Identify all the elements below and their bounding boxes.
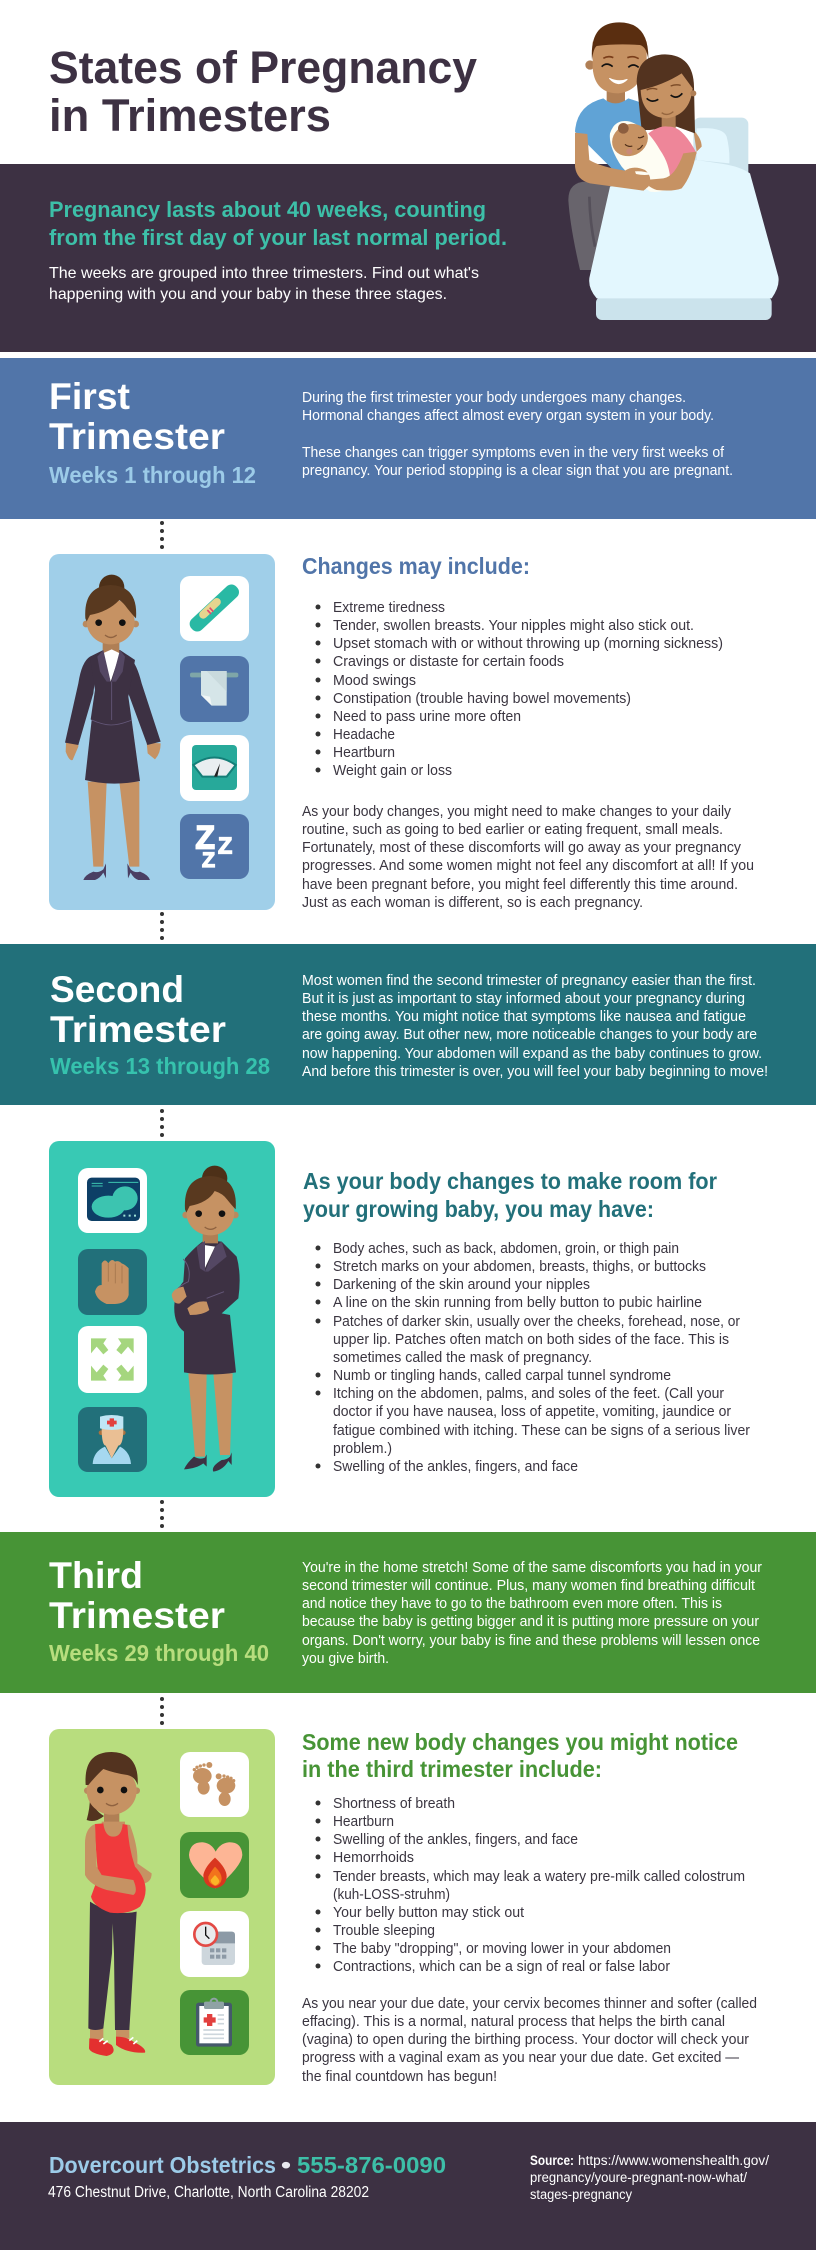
panel: footer	[0, 2122, 816, 2250]
bullet list: third trimester: Your belly button may stick out	[333, 1905, 524, 1921]
bullet list: third trimester: Tender breasts, which may leak a watery pre-milk called colostrum	[333, 1869, 745, 1885]
bullet list: third trimester: Hemorrhoids	[333, 1850, 414, 1866]
panel: intro band	[0, 164, 816, 352]
icon: footprints	[180, 1752, 249, 1817]
panel: second trimester band	[0, 944, 816, 1105]
panel: second trimester band: are going away. But other new, more noticeable changes to your body are	[302, 1027, 757, 1043]
panel: third trimester band: second trimester will continue. Plus, many women find breathing difficult	[302, 1578, 755, 1594]
icon: sleep Z letters: Z	[202, 848, 215, 872]
panel: second trimester band: Trimester	[50, 1009, 226, 1050]
text block: first trimester note: As your body changes, you might need to make changes to your daily	[302, 804, 732, 820]
title	[49, 42, 477, 141]
text block: third trimester note: As you near your due date, your cervix becomes thinner and softer (called	[302, 1996, 757, 2012]
bullet list: third trimester: Trouble sleeping	[333, 1923, 435, 1939]
heading: third trimester changes	[302, 1729, 738, 1782]
panel: footer: stages-pregnancy	[530, 2187, 632, 2202]
panel: second trimester band: these months. You might notice that symptoms like nausea and fatigue	[302, 1009, 746, 1025]
panel: first trimester illustration	[49, 554, 275, 910]
illustration: couple with newborn in bed	[568, 22, 779, 320]
panel: intro band: from the first day of your last normal period.	[49, 225, 507, 250]
bullet list: second trimester: Swelling of the ankles, fingers, and face	[333, 1459, 578, 1475]
text block: first trimester note	[302, 804, 754, 911]
panel: third trimester band: you give birth.	[302, 1651, 389, 1667]
bullet list: third trimester: Heartburn	[333, 1814, 394, 1830]
bullet list: first trimester: Mood swings	[333, 673, 416, 689]
panel: footer: 476 Chestnut Drive, Charlotte, North Carolina 28202	[48, 2184, 369, 2201]
text block: third trimester note: effacing). This is a normal, natural process that helps the birth canal	[302, 2014, 725, 2030]
text block: third trimester note	[302, 1996, 757, 2085]
heading: changes may include: Changes may include:	[302, 553, 530, 579]
panel: third trimester band: organs. Don't worry, your baby is fine and these problems will lessen once	[302, 1633, 760, 1649]
bullet list: first trimester: Weight gain or loss	[333, 763, 452, 779]
bullet list: third trimester: The baby "dropping", or moving lower in your abdomen	[333, 1941, 671, 1957]
icon: pregnancy test	[180, 576, 249, 641]
heading: second trimester changes: As your body changes to make room for	[303, 1168, 717, 1194]
bullet list: first trimester	[316, 600, 723, 779]
panel: first trimester band: During the first trimester your body undergoes many changes.	[302, 390, 686, 406]
panel: intro band: The weeks are grouped into three trimesters. Find out what's	[49, 265, 479, 282]
bullet list: second trimester: Stretch marks on your abdomen, breasts, thighs, or buttocks	[333, 1259, 706, 1275]
panel: third trimester band: Weeks 29 through 40	[49, 1640, 269, 1666]
title: in Trimesters	[49, 90, 331, 141]
panel: first trimester band: Weeks 1 through 12	[49, 462, 256, 488]
icon: hand	[78, 1249, 147, 1315]
panel: footer: •	[281, 2152, 291, 2178]
panel: first trimester band	[0, 358, 816, 519]
panel: third trimester band	[0, 1532, 816, 1693]
bullet list: second trimester: Itching on the abdomen, palms, and soles of the feet. (Call your	[333, 1386, 724, 1402]
panel: footer: Source:	[530, 2153, 574, 2168]
panel: second trimester band: But it is just as important to stay informed about your pregnancy during	[302, 991, 745, 1007]
panel: second trimester band: Second	[50, 969, 184, 1010]
bullet list: third trimester: Shortness of breath	[333, 1796, 455, 1812]
panel: first trimester band: These changes can trigger symptoms even in the very first weeks of	[302, 445, 725, 461]
bullet list: first trimester: Headache	[333, 727, 395, 743]
figure: woman in suit	[65, 575, 161, 880]
text block: third trimester note: progress with a vaginal exam as you near your due date. Get excited —	[302, 2050, 740, 2066]
panel: footer: pregnancy/youre-pregnant-now-what/	[530, 2170, 747, 2185]
icon: clock and calendar	[180, 1911, 249, 1977]
bullet list: first trimester: Upset stomach with or without throwing up (morning sickness)	[333, 636, 723, 652]
bullet list: first trimester: Tender, swollen breasts. Your nipples might also stick out.	[333, 618, 694, 634]
panel: first trimester band: pregnancy. Your period stopping is a clear sign that you are pregnant.	[302, 463, 733, 479]
heading: second trimester changes	[303, 1168, 717, 1222]
panel: footer: Dovercourt Obstetrics	[49, 2152, 276, 2178]
heading: second trimester changes: your growing baby, you may have:	[303, 1196, 654, 1222]
bullet list: second trimester: problem.)	[333, 1441, 392, 1457]
panel: intro band: Pregnancy lasts about 40 weeks, counting	[49, 197, 486, 222]
icon: sleep Z letters: Z	[218, 833, 232, 859]
panel: first trimester band: Trimester	[49, 416, 225, 457]
icon: heart with flame	[180, 1832, 249, 1898]
bullet list: first trimester: Constipation (trouble having bowel movements)	[333, 691, 631, 707]
text block: third trimester note: the final countdown has begun!	[302, 2069, 497, 2085]
heading: third trimester changes: Some new body changes you might notice	[302, 1729, 738, 1755]
text block: first trimester note: Just as each woman is different, so is each pregnancy.	[302, 895, 643, 911]
panel: first trimester band: Hormonal changes affect almost every organ system in your body.	[302, 408, 714, 424]
bullet list: second trimester: A line on the skin running from belly button to pubic hairline	[333, 1295, 702, 1311]
icon: ultrasound screen	[78, 1168, 147, 1233]
icon: weighing scale	[180, 735, 249, 801]
bullet list: first trimester: Heartburn	[333, 745, 395, 761]
figure: pregnant woman in red top	[84, 1752, 152, 2056]
bullet list: third trimester: Swelling of the ankles, fingers, and face	[333, 1832, 578, 1848]
bullet list: first trimester: Need to pass urine more often	[333, 709, 521, 725]
panel: third trimester band: You're in the home stretch! Some of the same discomforts you had in your	[302, 1560, 762, 1576]
bullet list: second trimester: sometimes called the mask of pregnancy.	[333, 1350, 592, 1366]
text block: first trimester note: have been pregnant before, you might feel differently this time around.	[302, 877, 738, 893]
panel: third trimester band: Third	[49, 1555, 143, 1596]
bullet list: second trimester: Body aches, such as back, abdomen, groin, or thigh pain	[333, 1241, 679, 1257]
panel: second trimester band: now happening. Your abdomen will expand as the baby continues to grow.	[302, 1046, 762, 1062]
panel: footer: https://www.womenshealth.gov/	[578, 2153, 769, 2168]
bullet list: first trimester: Cravings or distaste for certain foods	[333, 654, 564, 670]
bullet list: first trimester: Extreme tiredness	[333, 600, 445, 616]
panel: footer: 555-876-0090	[297, 2152, 446, 2178]
icon: stretching arrows	[78, 1326, 147, 1393]
panel: second trimester band: Most women find the second trimester of pregnancy easier than the first.	[302, 973, 756, 989]
bullet list: second trimester: Darkening of the skin around your nipples	[333, 1277, 590, 1293]
icon: doctor	[78, 1407, 147, 1472]
figure: pregnant woman in suit	[172, 1166, 240, 1472]
icon: toilet paper	[180, 656, 249, 722]
icon: sleep Z letters: Z	[195, 819, 215, 855]
panel: second trimester band: And before this trimester is over, you will feel your baby beginning to move!	[302, 1064, 768, 1080]
bullet list: second trimester	[316, 1241, 750, 1475]
connector dots	[160, 521, 164, 1725]
title: States of Pregnancy	[49, 42, 477, 93]
text block: first trimester note: Fortunately, most of these discomforts will go away as your pregnancy	[302, 840, 742, 856]
panel: third trimester band: and notice they have to go to the bathroom even more often. This is	[302, 1596, 722, 1612]
text block: third trimester note: (vagina) to open during the birthing process. Your doctor will check your	[302, 2032, 749, 2048]
bullet list: second trimester: upper lip. Patches often match on both sides of the face. This is	[333, 1332, 729, 1348]
heading: third trimester changes: in the third trimester include:	[302, 1756, 602, 1782]
panel: first trimester band: First	[49, 376, 130, 417]
icon: medical clipboard	[180, 1990, 249, 2055]
text block: first trimester note: progresses. And some women might not feel any discomfort at all! If you	[302, 858, 754, 874]
panel: intro band: happening with you and your baby in these three stages.	[49, 286, 447, 303]
bullet list: second trimester: Numb or tingling hands, called carpal tunnel syndrome	[333, 1368, 671, 1384]
bullet list: second trimester: Patches of darker skin, usually over the cheeks, forehead, nose, or	[333, 1314, 740, 1330]
bullet list: third trimester: Contractions, which can be a sign of real or false labor	[333, 1959, 670, 1975]
text block: first trimester note: routine, such as going to bed earlier or eating frequent, small meals.	[302, 822, 723, 838]
bullet list: third trimester	[316, 1796, 745, 1975]
bullet list: second trimester: doctor if you have nausea, loss of appetite, vomiting, jaundice or	[333, 1404, 731, 1420]
panel: second trimester illustration	[49, 1141, 275, 1497]
panel: third trimester illustration	[49, 1729, 275, 2085]
panel: third trimester band: Trimester	[49, 1595, 225, 1636]
icon: sleep Z letters	[180, 814, 249, 879]
bullet list: second trimester: fatigue combined with itching. These can be signs of a serious liver	[333, 1423, 750, 1439]
bullet list: third trimester: (kuh-LOSS-struhm)	[333, 1887, 450, 1903]
panel: second trimester band: Weeks 13 through 28	[50, 1053, 270, 1079]
panel: third trimester band: because the baby is getting bigger and it is putting more pressure on your	[302, 1614, 759, 1630]
